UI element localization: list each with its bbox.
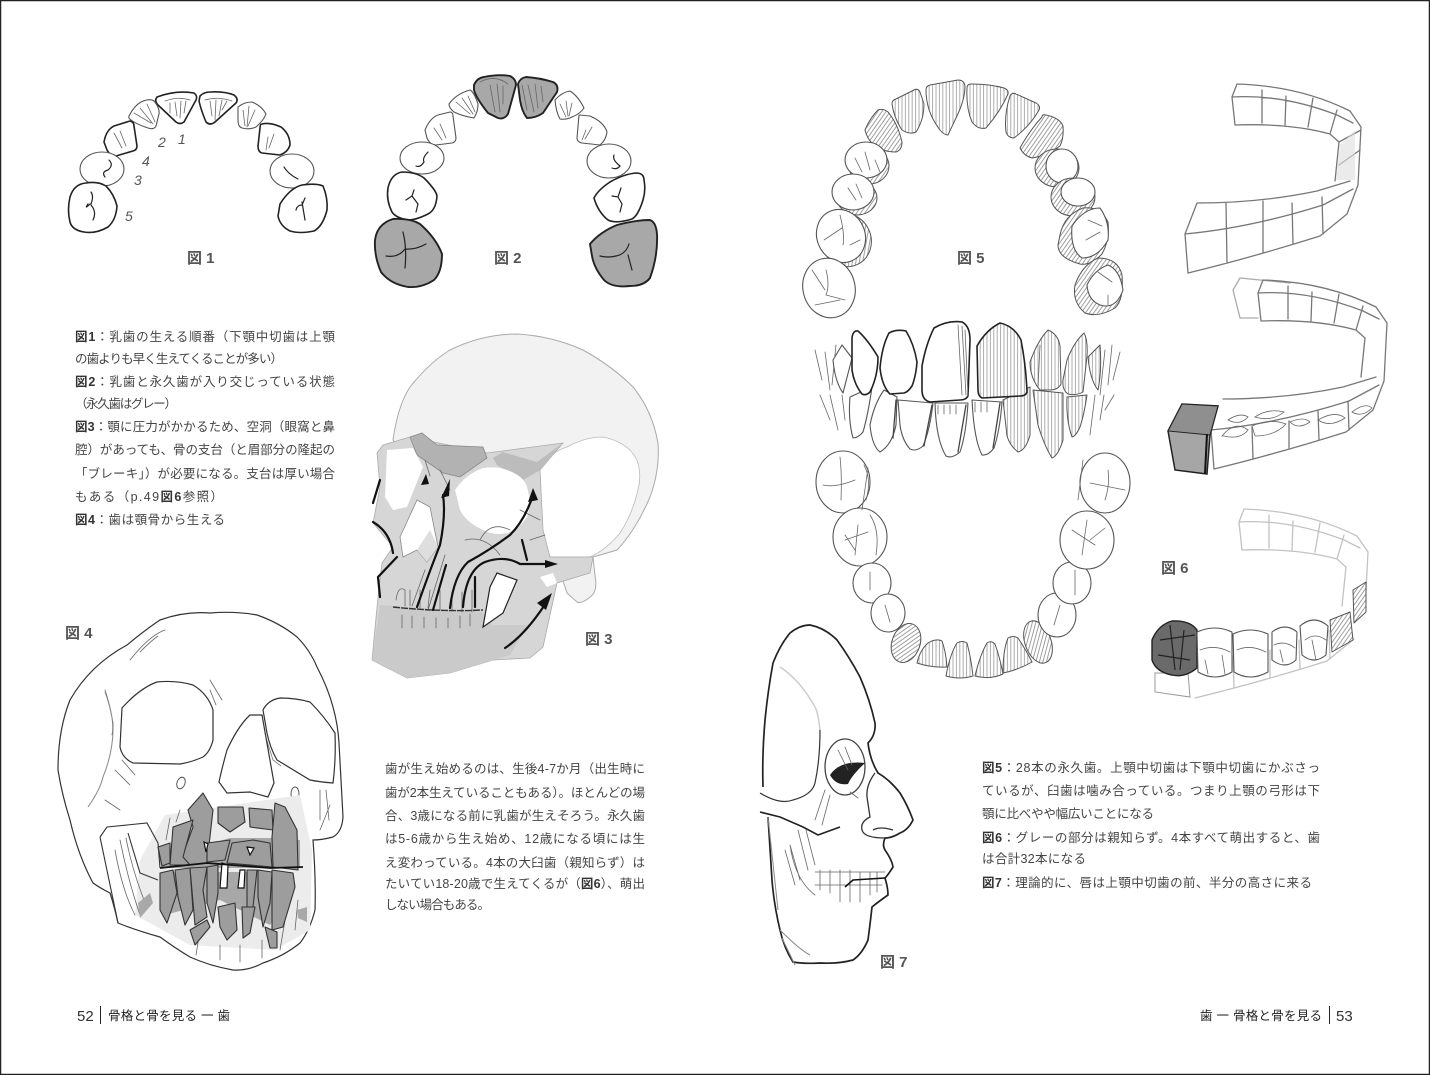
upper teeth [182,793,213,865]
upper teeth [833,345,852,393]
figure 2: mixed primary and permanent teeth [375,75,657,287]
footer: page 53: 歯 一 骨格と骨を見る [1200,1008,1322,1023]
footer: page 52: 52 [77,1008,94,1025]
jaw openings [483,573,517,627]
teeth and hatching [396,460,545,628]
text block: tooth eruption timing: 合、3歳になる前に乳歯が生えそろう。永久歯 [385,808,645,823]
block 2 [1233,278,1290,318]
text block: tooth eruption timing: は5-6歳から生え始め、12歳になる頃には生 [385,832,645,846]
text block: figures 5 to 7 captions: 図5：28本の永久歯。上顎中切歯は下顎中切歯にかぶさっ [982,760,1320,775]
figure 3: skull three-quarter view with stress arrows [372,334,658,678]
tooth order numbers: 4 [142,153,150,169]
text block: figures 1 to 4 captions: 図4：歯は顎骨から生える [75,513,225,527]
text block: figures 1 to 4 captions [75,329,335,527]
text block: figures 1 to 4 captions: 図1：乳歯の生える順番（下顎中切歯は上顎 [75,329,335,344]
text block: figures 1 to 4 captions: 「ブレーキ」）が必要になる。支台は厚い場合 [75,466,335,481]
text block: figures 1 to 4 captions: （永久歯はグレー） [75,397,177,411]
grey wisdom tooth block [1168,404,1218,474]
tooth order numbers [125,131,186,224]
label: figure 4: 図 4 [65,625,93,642]
lower permanent teeth arch [816,451,1130,678]
text block: tooth eruption timing: しない場合もある。 [385,898,490,912]
facial bones [372,437,593,678]
label: figure 7: 図 7 [880,954,908,971]
profile outline [763,625,913,963]
dark wisdom molar [1152,621,1197,676]
text block: figures 5 to 7 captions: 図6：グレーの部分は親知らず。4本すべて萌出すると、歯 [982,831,1320,845]
figure 5: upper permanent teeth arch [796,80,1123,324]
figure 4: frontal skull with tooth roots in gray [58,612,343,970]
text block: figures 1 to 4 captions: 腔）があっても、骨の支台（と眉部分の隆起の [75,442,335,457]
figure 6: dental arch block studies [1152,84,1387,698]
far teeth lines [815,345,1120,435]
label: figure 6: 図 6 [1161,560,1189,577]
eye socket [825,739,865,795]
label: figure 2: 図 2 [494,250,522,267]
tooth order numbers: 5 [125,208,133,224]
lower teeth [160,870,177,923]
text block: figures 5 to 7 captions: は合計32本になる [982,851,1086,866]
text block: tooth eruption timing: 歯が生え始めるのは、生後4-7か月（出生時に [385,761,645,776]
cheekbone and jaw lines [100,823,160,923]
text block: figures 1 to 4 captions: もある（p.49図6参照） [75,490,223,504]
text block: tooth eruption timing: 歯が2本生えていることもある）。ほとんどの場 [385,785,645,800]
orbits [385,448,423,510]
hatching around teeth [135,795,312,950]
label: figure 1: 図 1 [187,250,215,267]
text block: tooth eruption timing: え変わっている。4本の大臼歯（親知らず）は [385,855,645,870]
orbits and nose [120,681,213,764]
text block: figures 5 to 7 captions: ているが、臼歯は噛み合っている。つまり上顎の弓形は下 [982,783,1320,798]
text block: figures 1 to 4 captions: 図2：乳歯と永久歯が入り交じっている状態 [75,374,335,389]
nose [862,773,893,838]
footer: page 52 [77,1006,230,1025]
lower teeth [849,387,872,438]
brow ridges [410,433,487,477]
lip line [845,878,885,887]
text block: figures 1 to 4 captions: 図3：顎に圧力がかかるため、空洞（眼窩と鼻 [75,419,335,434]
block 1 [1185,84,1361,273]
temporal fossa [540,437,640,557]
front view of closed teeth [815,322,1120,458]
tooth order numbers: 2 [157,134,166,150]
gray tooth mass [160,838,300,925]
figure 7: side profile with lip position [760,625,913,965]
footer: page 52: 骨格と骨を見る 一 歯 [108,1008,230,1023]
text block: figures 1 to 4 captions: の歯よりも早く生えてくることが多い） [75,351,283,366]
nasal opening [400,500,438,562]
tooth order numbers: 3 [134,172,142,188]
footer: page 53 [1200,1006,1353,1025]
text block: tooth eruption timing: たいてい18-20歳で生えてくるが（図6）、萌出 [385,876,645,891]
teeth row [1197,628,1232,677]
tooth order numbers: 1 [178,131,186,147]
cheek hatch and teeth [785,790,885,902]
cranium [393,334,658,602]
label: figure 3: 図 3 [585,631,613,648]
text block: figures 5 to 7 captions [982,760,1320,890]
text block: tooth eruption timing [385,761,645,912]
footer: page 53: 53 [1336,1008,1353,1025]
text block: figures 5 to 7 captions: 顎に比べやや幅広いことになる [982,806,1154,821]
skull outline [58,612,343,970]
label: figure 5: 図 5 [957,250,985,267]
gaps and bite line [204,842,254,888]
text block: figures 5 to 7 captions: 図7：理論的に、唇は上顎中切歯の前、半分の高さに来る [982,875,1312,890]
figure 1: primary teeth arch [68,92,327,232]
block 3 [1195,509,1368,698]
stress arrows [373,480,553,648]
